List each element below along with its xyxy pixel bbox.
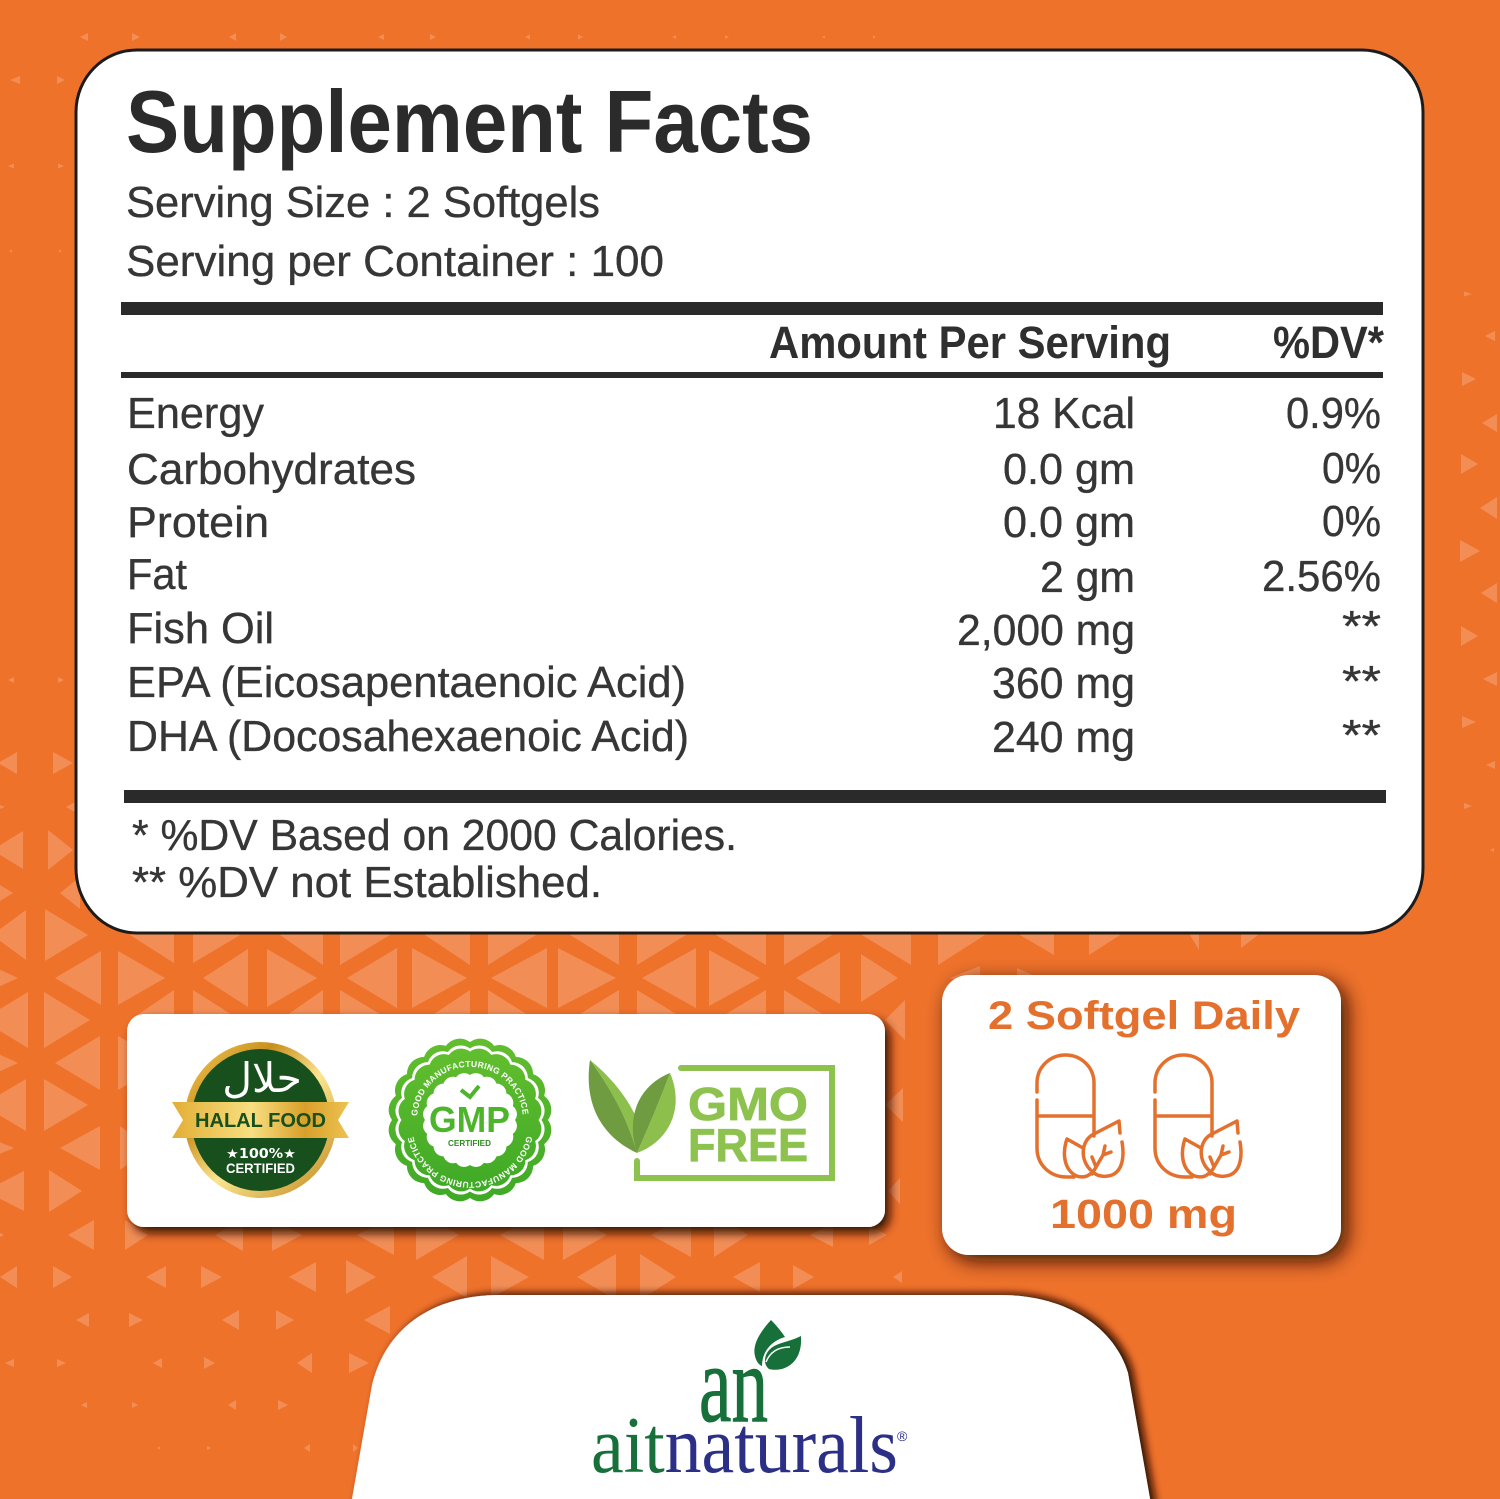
- panel: certification badges: [124, 1012, 898, 1242]
- row: EPA: [127, 657, 1381, 708]
- row: energy: 0.9%: [1286, 389, 1381, 438]
- row: fish oil: **: [1342, 602, 1381, 651]
- registered mark: ®: [897, 1428, 908, 1444]
- logo mark: an: an: [699, 1323, 768, 1445]
- row: fat: Fat: [127, 550, 187, 599]
- icon: GMO free badge: FREE: [688, 1119, 808, 1171]
- row: EPA: 360 mg: [992, 659, 1135, 708]
- table header rule: [121, 372, 1383, 378]
- row: protein: 0.0 gm: [1003, 498, 1135, 547]
- row: protein: Protein: [127, 498, 269, 547]
- table bottom rule: [124, 790, 1386, 803]
- text: servings per container: Serving per Container : 100: [126, 237, 664, 286]
- column heading: amount per serving: Amount Per Serving: [769, 317, 1171, 368]
- table top rule: [121, 302, 1383, 315]
- icon: halal food badge: [172, 1042, 349, 1198]
- text: 1000 mg: 1000 mg: [1050, 1191, 1237, 1237]
- row: carbohydrates: [127, 444, 1381, 494]
- footnote: daily value basis: * %DV Based on 2000 Calories.: [132, 811, 737, 860]
- row: DHA: 240 mg: [992, 713, 1135, 762]
- row: carbohydrates: Carbohydrates: [127, 445, 416, 494]
- footnote: daily value not established: ** %DV not Established.: [132, 858, 602, 907]
- icon: GMP certified badge: [388, 1038, 552, 1202]
- row: DHA: DHA (Docosahexaenoic Acid): [127, 712, 689, 761]
- icon: GMP certified badge: GOOD MANUFACTURING PRACTICE: [412, 1061, 528, 1116]
- row: DHA: **: [1342, 711, 1381, 760]
- text: 2 softgel daily: 2 Softgel Daily: [988, 994, 1301, 1038]
- icon: logo leaves: [754, 1320, 801, 1370]
- icon: GMP certified badge: GOOD MANUFACTURING PRACTICE: [408, 1136, 532, 1188]
- icon: halal food badge: حلال: [222, 1054, 302, 1102]
- row: DHA: [127, 711, 1381, 762]
- icon: GMP certified badge: GMP: [429, 1099, 510, 1140]
- icon: second softgel capsule with leaves: [1155, 1055, 1241, 1177]
- row: energy: Energy: [127, 389, 264, 438]
- icon: GMP certified badge: CERTIFIED: [448, 1139, 491, 1148]
- panel: daily dosage: [942, 975, 1341, 1255]
- icon: GMO free badge: GMO: [688, 1078, 808, 1130]
- row: EPA: **: [1342, 657, 1381, 706]
- logo wordmark: aitnaturals: aitnaturals: [591, 1402, 898, 1490]
- row: carbohydrates: 0.0 gm: [1003, 445, 1135, 494]
- icon: GMO free badge: [589, 1060, 832, 1178]
- row: fat: [127, 550, 1381, 602]
- column heading: percent daily value: %DV*: [1273, 317, 1384, 368]
- panel: brand logo: [350, 1295, 1152, 1499]
- icon: softgel capsule with leaves: [1037, 1055, 1123, 1177]
- row: fish oil: Fish Oil: [127, 604, 274, 653]
- text: serving size: Serving Size : 2 Softgels: [126, 178, 600, 227]
- row: fat: 2.56%: [1262, 552, 1381, 601]
- panel: supplement facts card: [76, 50, 1423, 933]
- row: carbohydrates: 0%: [1322, 444, 1381, 493]
- row: energy: [127, 389, 1381, 438]
- icon: halal food badge: CERTIFIED: [226, 1160, 295, 1176]
- row: energy: 18 Kcal: [993, 389, 1135, 438]
- heading: Supplement Facts: Supplement Facts: [126, 72, 813, 171]
- row: fat: 2 gm: [1040, 553, 1135, 602]
- row: EPA: EPA (Eicosapentaenoic Acid): [127, 658, 686, 707]
- row: fish oil: 2,000 mg: [957, 606, 1135, 655]
- row: protein: 0%: [1322, 497, 1381, 546]
- row: protein: [127, 497, 1381, 547]
- icon: halal food badge: HALAL FOOD: [195, 1110, 326, 1132]
- icon: halal food badge: ★100%★: [226, 1147, 296, 1162]
- row: fish oil: [127, 602, 1381, 655]
